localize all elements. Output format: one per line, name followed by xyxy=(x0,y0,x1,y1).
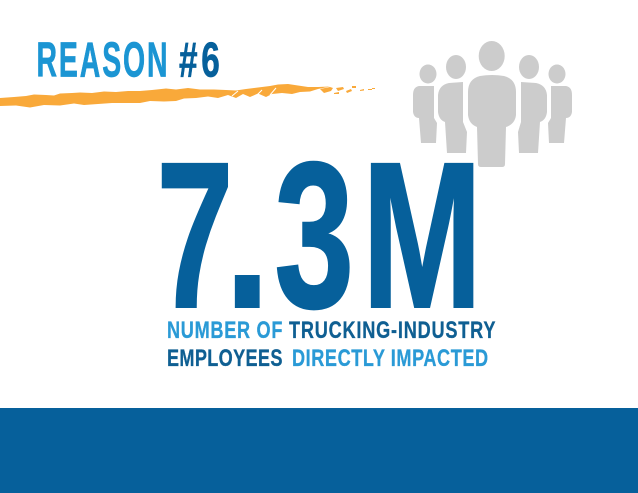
caption line 2: EMPLOYEES xyxy=(167,343,282,372)
orange brush stroke xyxy=(0,84,375,108)
figure: center xyxy=(468,41,516,167)
figure: inner left xyxy=(438,55,467,153)
big number: 7.3M: 3 xyxy=(274,118,354,351)
icon: group of people xyxy=(413,41,572,167)
heading: reason #6 xyxy=(36,32,220,88)
heading: reason #6: REASON xyxy=(36,34,168,88)
footer bar xyxy=(0,408,638,493)
caption line 1: TRUCKING-INDUSTRY xyxy=(289,315,496,344)
figure: far left xyxy=(413,64,437,143)
big number: 7.3M: 7 xyxy=(156,120,233,352)
big number: 7.3M: . xyxy=(224,118,270,351)
caption line 1 xyxy=(167,315,496,344)
caption line 2: DIRECTLY IMPACTED xyxy=(292,343,488,372)
figure: inner right xyxy=(518,55,547,153)
caption line 1: NUMBER OF xyxy=(167,315,282,344)
heading: reason #6: #6 xyxy=(179,32,220,87)
big number: 7.3M xyxy=(156,118,482,352)
caption line 2 xyxy=(167,343,488,372)
figure: far right xyxy=(548,64,572,143)
big number: 7.3M: M xyxy=(362,119,482,351)
